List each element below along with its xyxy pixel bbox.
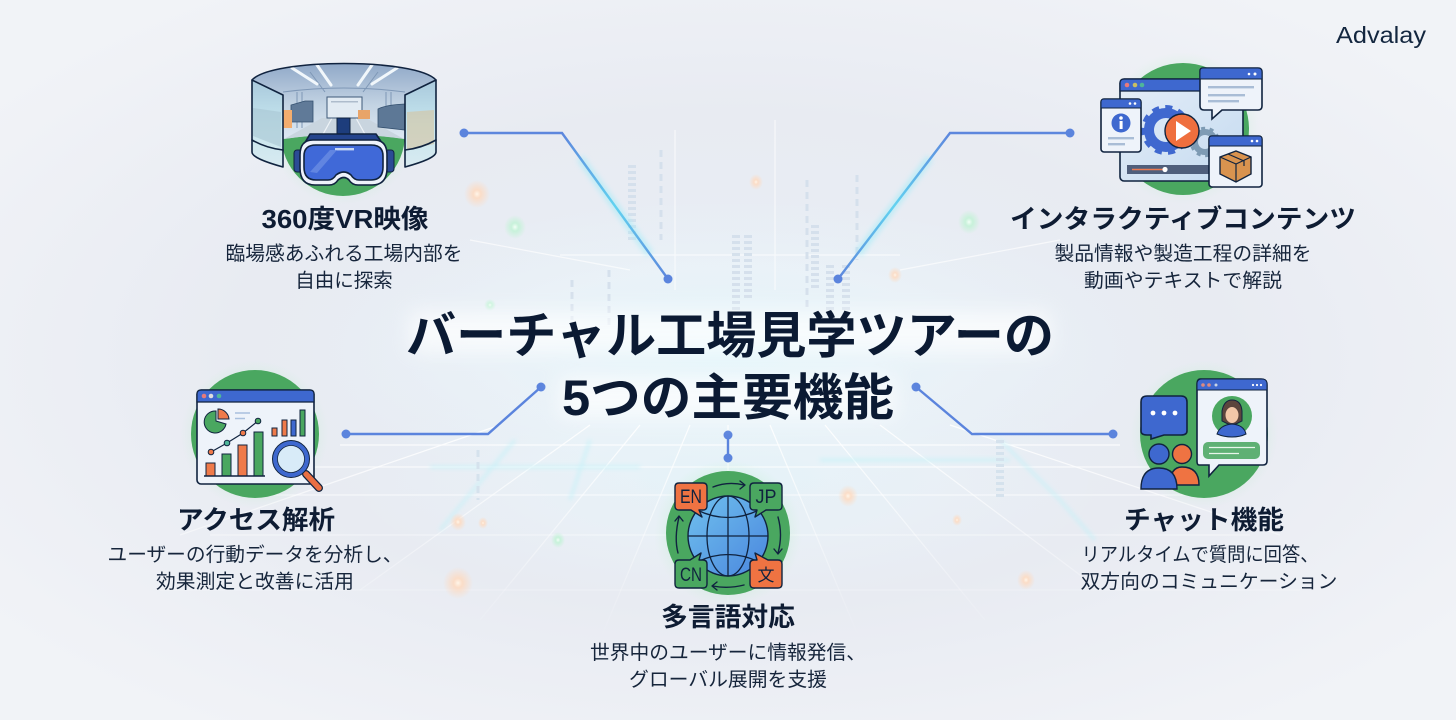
- description: 効果測定と改善に活用: [156, 571, 354, 593]
- icon: interactive windows: [1101, 52, 1262, 204]
- connector: interactive: [834, 128, 1074, 284]
- title: [406, 308, 1054, 426]
- info card: [1101, 99, 1141, 152]
- connector lines: [342, 128, 1118, 462]
- description: 双方向のコミュニケーション: [1080, 571, 1338, 593]
- description: ユーザーの行動データを分析し、: [108, 544, 402, 566]
- icon: chat and operator: [1130, 360, 1278, 508]
- description: グローバル展開を支援: [629, 669, 827, 691]
- panel: 360 VR: [226, 61, 462, 292]
- connector: analytics: [342, 382, 546, 438]
- heading: アクセス解析: [177, 505, 335, 535]
- panel: chat: [1080, 360, 1338, 593]
- description: リアルタイムで質問に回答、: [1082, 544, 1318, 566]
- speech card: [1200, 68, 1262, 119]
- heading: 360度VR映像: [262, 204, 428, 234]
- icon: globe with languages: CN: [680, 565, 702, 586]
- description: 製品情報や製造工程の詳細を: [1054, 243, 1312, 265]
- icon: globe with languages: EN: [680, 487, 702, 508]
- heading: 多言語対応: [661, 602, 795, 632]
- logo: Advalay: [1336, 22, 1427, 48]
- description: 臨場感あふれる工場内部を: [226, 243, 462, 265]
- panel: multilingual: [590, 459, 866, 691]
- title: バーチャル工場見学ツアーの: [406, 308, 1054, 364]
- icon: globe with languages: JP: [756, 487, 776, 508]
- connector: multilingual: [724, 430, 732, 462]
- box card: [1209, 136, 1262, 187]
- icon: globe with languages: [654, 459, 802, 607]
- heading: インタラクティブコンテンツ: [1010, 204, 1356, 234]
- icon: analytics dashboard: [181, 360, 329, 508]
- panel: interactive content: [1010, 52, 1356, 292]
- panel: analytics: [108, 360, 402, 593]
- heading: チャット機能: [1124, 505, 1284, 535]
- description: 動画やテキストで解説: [1084, 270, 1282, 292]
- title: 5つの主要機能: [562, 370, 894, 426]
- gears: [1144, 108, 1218, 156]
- icon: VR headset and panoramic factory view: [252, 61, 436, 205]
- connector: 360 VR: [460, 128, 920, 284]
- icon: globe with languages: 文: [758, 566, 774, 585]
- description: 世界中のユーザーに情報発信、: [590, 642, 866, 664]
- description: 自由に探索: [295, 270, 393, 292]
- connector: chat: [912, 382, 1118, 438]
